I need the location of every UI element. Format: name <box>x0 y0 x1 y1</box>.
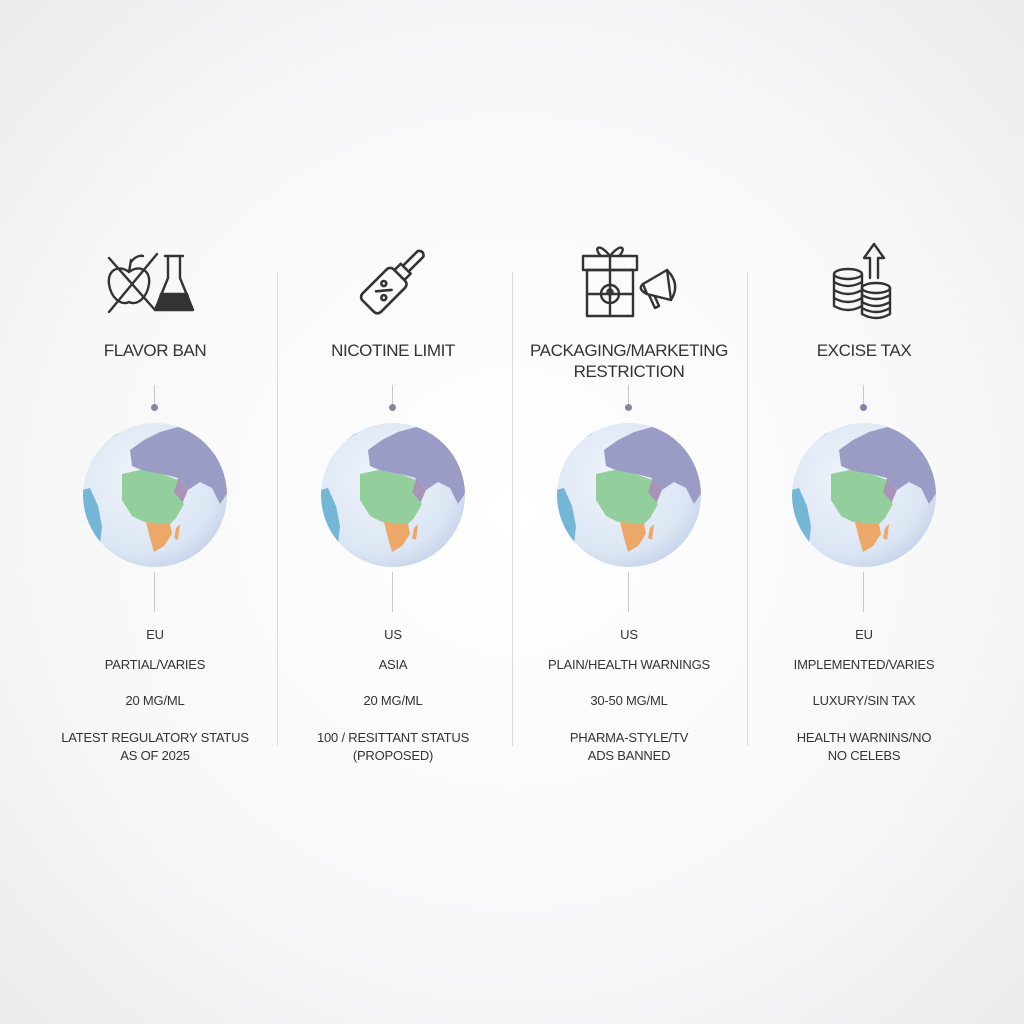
panel: nicotine limit <box>317 250 469 763</box>
text: status: ASIA <box>379 657 407 672</box>
title: PACKAGING/MARKETING <box>530 341 728 360</box>
text: region: EU <box>855 627 873 642</box>
text: note: 100 / RESITTANT STATUS <box>317 730 469 745</box>
text: limit: 30-50 MG/ML <box>590 693 668 708</box>
text: note: AS OF 2025 <box>120 748 190 763</box>
divider <box>277 272 278 746</box>
text: note: LATEST REGULATORY STATUS <box>61 730 249 745</box>
text: note: HEALTH WARNINS/NO <box>797 730 931 745</box>
icon: coins with up arrow <box>832 242 892 320</box>
connector <box>628 385 629 407</box>
text: status: IMPLEMENTED/VARIES <box>794 657 934 672</box>
globe <box>83 423 227 567</box>
title: EXCISE TAX <box>817 341 911 360</box>
text: region: EU <box>146 627 164 642</box>
text: limit: 20 MG/ML <box>363 693 423 708</box>
connector <box>863 385 864 407</box>
connector <box>392 385 393 407</box>
icon: dropper bottle <box>360 250 425 315</box>
panel: excise tax <box>792 242 936 763</box>
dot <box>389 404 396 411</box>
text: note <box>61 730 249 763</box>
connector <box>154 385 155 407</box>
title <box>530 341 728 381</box>
text: note: NO CELEBS <box>828 748 900 763</box>
globe <box>557 423 701 567</box>
text: status: PARTIAL/VARIES <box>105 657 205 672</box>
globe <box>792 423 936 567</box>
panel: packaging/marketing <box>530 246 728 763</box>
icon: gift box and megaphone <box>582 246 676 318</box>
divider <box>512 272 513 746</box>
panel: flavor ban <box>61 252 249 763</box>
text: limit: 20 MG/ML <box>125 693 185 708</box>
text: note: PHARMA-STYLE/TV <box>570 730 688 745</box>
dot <box>151 404 158 411</box>
title: NICOTINE LIMIT <box>331 341 455 360</box>
text: note: (PROPOSED) <box>353 748 433 763</box>
text: limit: LUXURY/SIN TAX <box>813 693 915 708</box>
text: note: ADS BANNED <box>588 748 670 763</box>
text: note <box>797 730 931 763</box>
dot <box>625 404 632 411</box>
dot <box>860 404 867 411</box>
title: FLAVOR BAN <box>104 341 206 360</box>
icon: apple crossed and flask <box>108 252 194 314</box>
text: region: US <box>620 627 638 642</box>
text: note <box>570 730 688 763</box>
title: RESTRICTION <box>574 362 684 381</box>
text: status: PLAIN/HEALTH WARNINGS <box>548 657 710 672</box>
text: note <box>317 730 469 763</box>
divider <box>747 272 748 746</box>
globe <box>321 423 465 567</box>
text: region: US <box>384 627 402 642</box>
